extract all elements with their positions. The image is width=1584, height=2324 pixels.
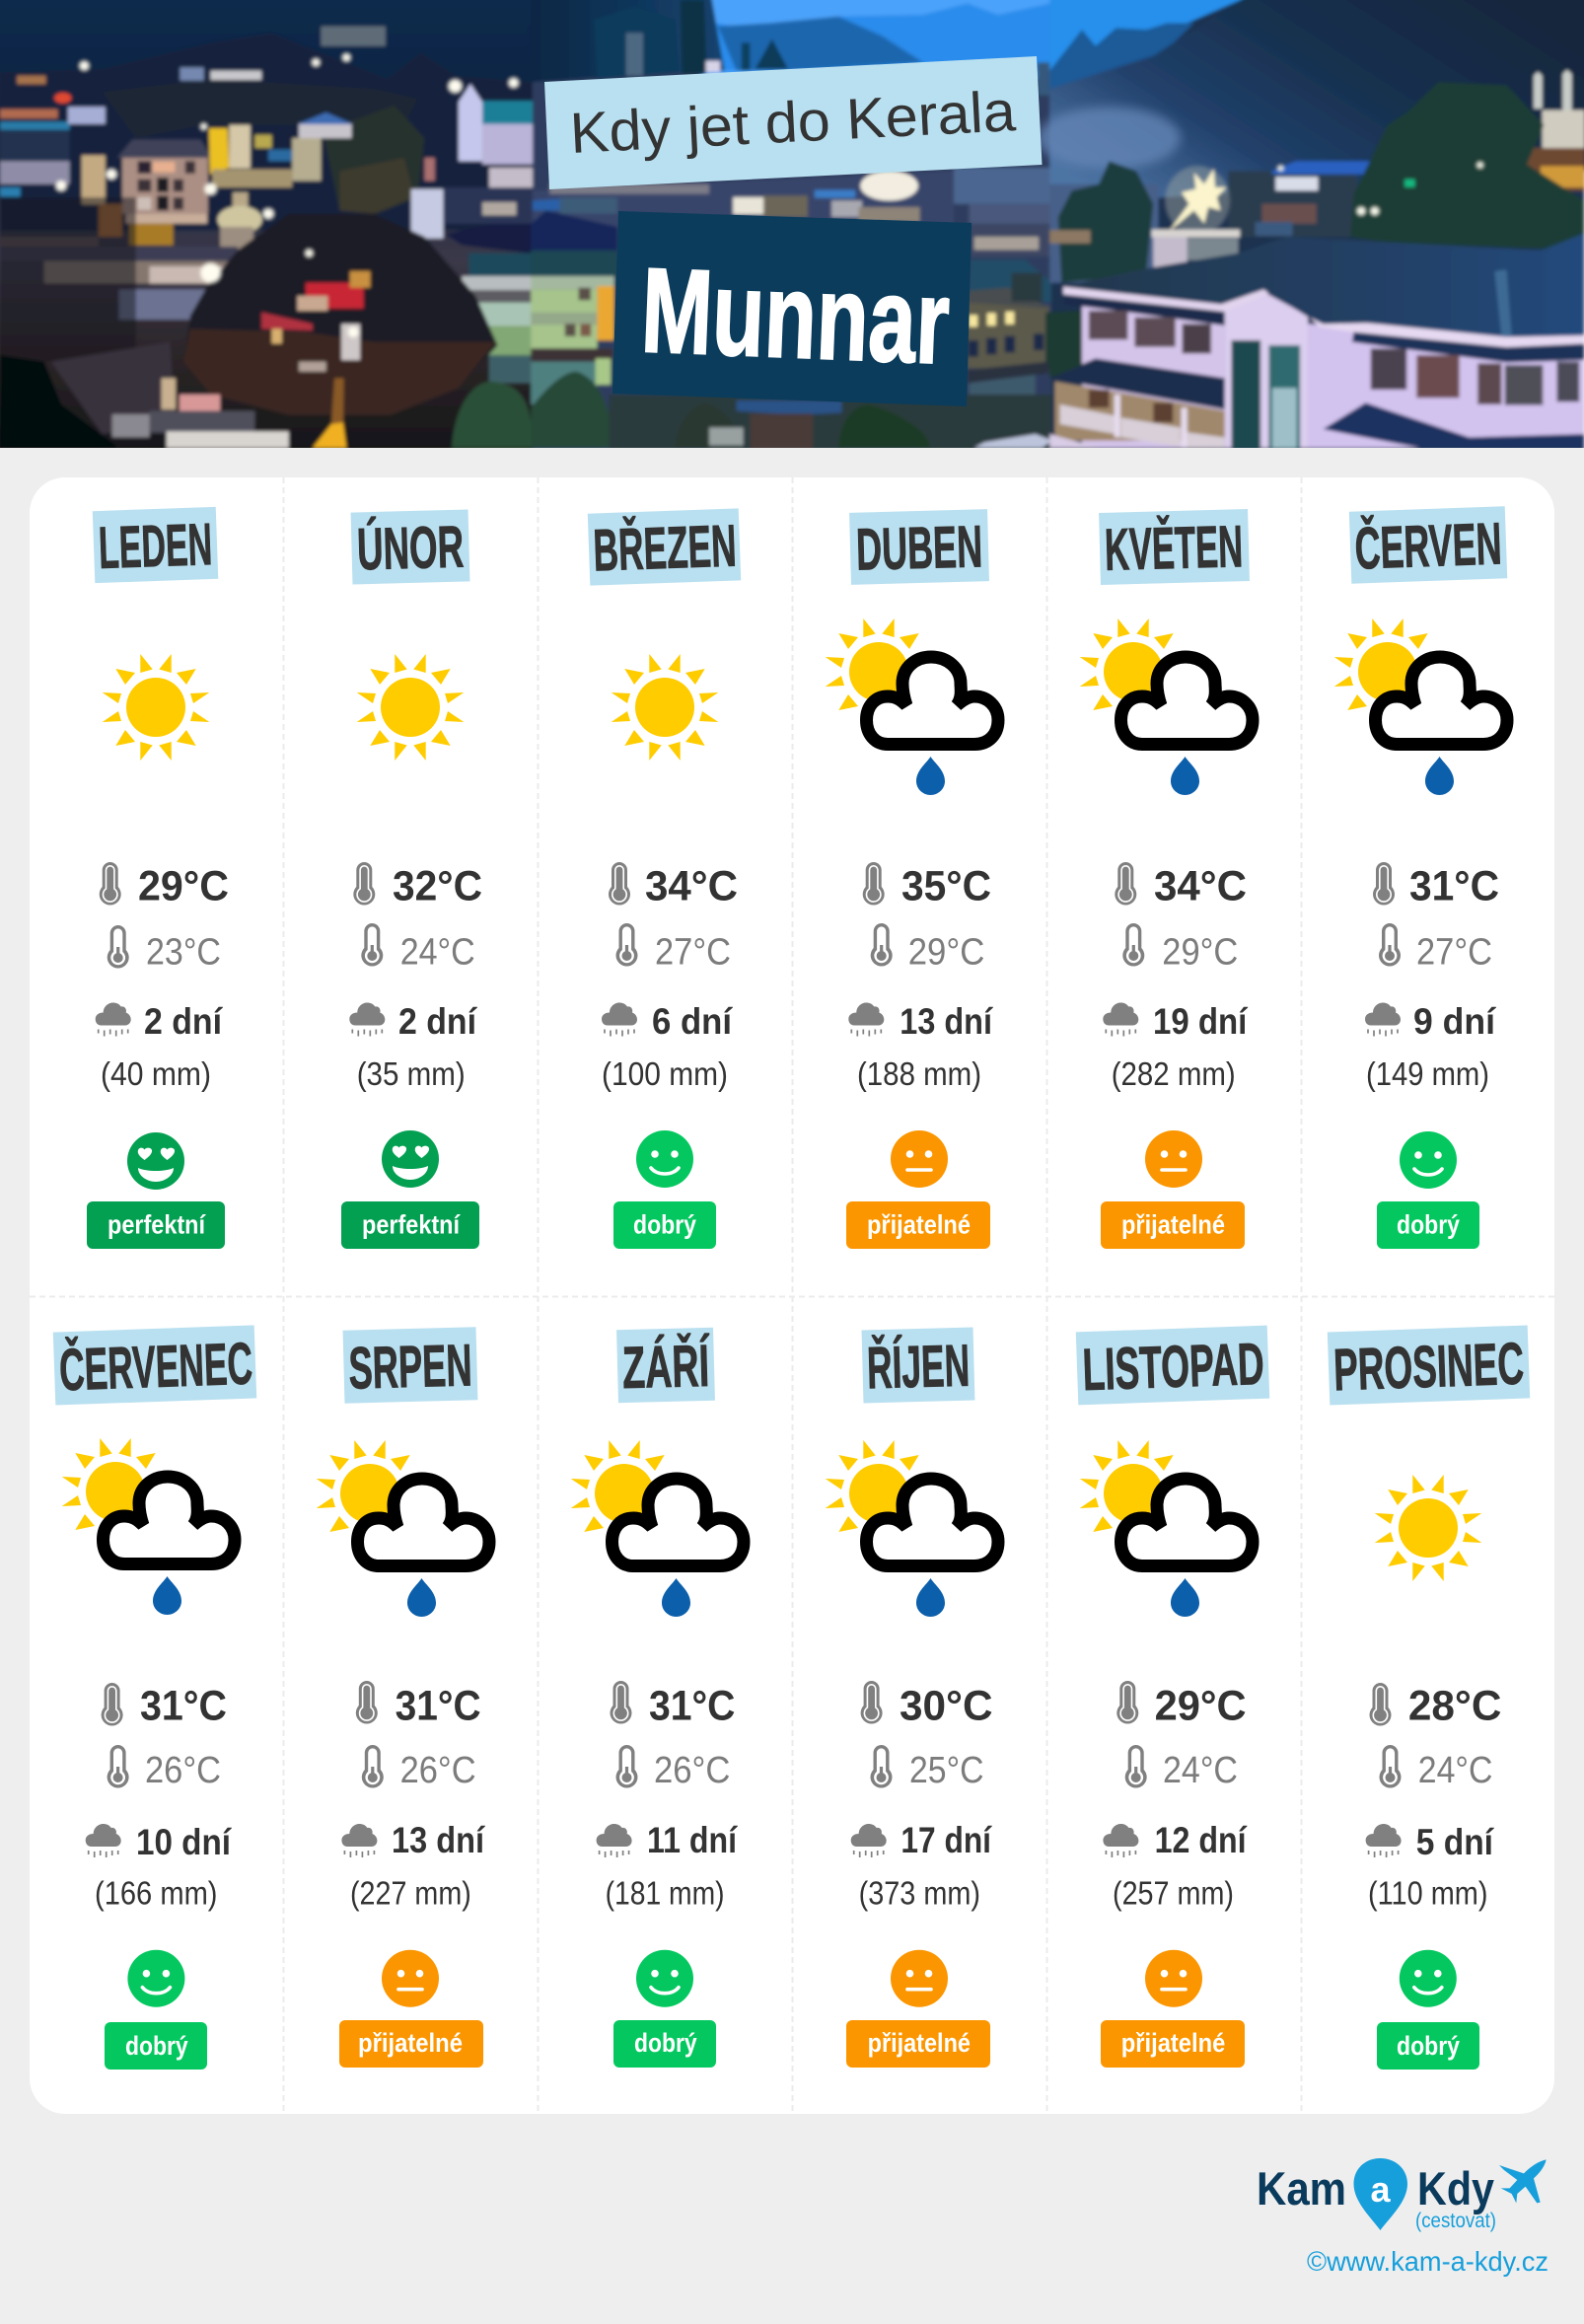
min temperature (1125, 1745, 1238, 1791)
title banner: Munnar: Munnar (639, 243, 952, 390)
rainfall: (35 mm) (357, 1055, 466, 1092)
rainfall: (227 mm) (350, 1875, 471, 1912)
month heading (588, 508, 741, 586)
rainy days: 17 dní (900, 1820, 992, 1860)
min temperature (1379, 923, 1492, 973)
icon: sun (357, 654, 464, 761)
max temperature (1116, 1681, 1247, 1730)
rating badge: dobrý (1397, 1209, 1460, 1239)
month: ČERVENEC (53, 1325, 256, 2070)
month heading: ČERVENEC (58, 1331, 253, 1403)
min temperature (362, 1745, 476, 1791)
month heading (862, 1328, 974, 1403)
max temperature (863, 862, 991, 909)
rainy days: 13 dní (900, 1001, 994, 1042)
min temperature (1122, 923, 1238, 973)
icon: sun with rain cloud (826, 1440, 998, 1617)
max temperature (1369, 1683, 1501, 1730)
max temperature (102, 1683, 227, 1730)
subtitle banner: Kdy jet do Kerala (544, 56, 1042, 189)
rating face (891, 1950, 948, 2007)
rainy days (851, 1820, 992, 1860)
min temperature: 24°C (400, 931, 475, 973)
rating face (1400, 1131, 1457, 1189)
icon: sun (612, 654, 718, 761)
rating badge (613, 1201, 716, 1249)
rating badge (1377, 1201, 1479, 1249)
icon: sun (103, 654, 209, 761)
rating badge: přijatelné (1121, 2028, 1225, 2058)
max temperature: 31°C (1409, 862, 1499, 909)
month heading (351, 509, 469, 585)
rating face (382, 1130, 439, 1188)
min temperature (1379, 1745, 1492, 1791)
rating badge (105, 2022, 207, 2070)
max temperature: 34°C (1154, 862, 1247, 909)
month heading: KVĚTEN (1104, 513, 1244, 583)
header photo: Munnar town at dusk (0, 0, 1584, 454)
icon: map pin: a (1370, 2169, 1391, 2210)
month: LISTOPAD (1076, 1326, 1269, 2068)
windows (1089, 311, 1127, 339)
church (459, 84, 482, 161)
rainy days: 9 dní (1413, 1001, 1497, 1042)
left part of the town (0, 0, 543, 454)
panel: monthly climate table (30, 477, 1554, 2114)
rainy days (1103, 1001, 1249, 1042)
rainy days (341, 1820, 486, 1860)
rating badge (846, 1201, 990, 1249)
rating badge (846, 2020, 990, 2068)
min temperature: 26°C (400, 1750, 476, 1791)
icon: sun with rain cloud (571, 1440, 744, 1617)
month heading (53, 1325, 256, 1406)
rating face (127, 1950, 184, 2007)
month heading (1076, 1326, 1269, 1405)
rating face (382, 1950, 439, 2007)
pale green house (447, 228, 533, 254)
rating badge: přijatelné (358, 2028, 463, 2058)
rating badge: přijatelné (1121, 1209, 1225, 1239)
icon: map pin (1353, 2158, 1407, 2230)
rainy days: 6 dní (652, 1001, 734, 1042)
min temperature: 26°C (145, 1750, 221, 1791)
max temperature (609, 862, 738, 909)
month: SRPEN (317, 1327, 489, 2068)
rainy days (1366, 1822, 1495, 1862)
month heading: DUBEN (855, 513, 983, 583)
rating face (1145, 1130, 1202, 1188)
icon: sun with rain cloud (317, 1440, 489, 1617)
rainy days: 2 dní (144, 1001, 224, 1042)
min temperature: 25°C (909, 1750, 984, 1791)
rating face (636, 1950, 693, 2007)
big tree (187, 213, 499, 357)
walls (1082, 306, 1225, 448)
min temperature: 29°C (908, 931, 984, 973)
max temperature: 31°C (140, 1683, 227, 1730)
icon: sun with rain cloud (1334, 618, 1507, 795)
month heading: LEDEN (98, 511, 213, 581)
rainfall: (188 mm) (857, 1055, 981, 1092)
month: ČERVEN (1334, 506, 1507, 1249)
rainy days: 5 dní (1416, 1822, 1495, 1862)
rainfall: (100 mm) (602, 1055, 728, 1092)
logo: Kam a Kdy: (cestovat) (1415, 2210, 1496, 2232)
min temperature (361, 923, 475, 973)
rainy days: 13 dní (392, 1820, 486, 1860)
max temperature (1115, 862, 1247, 909)
house beside the title (531, 210, 617, 251)
rainfall: (149 mm) (1366, 1055, 1489, 1092)
rating badge: přijatelné (867, 1209, 971, 1239)
rating badge (1377, 2022, 1479, 2070)
min temperature (108, 1745, 221, 1791)
rating badge: perfektní (362, 1209, 461, 1239)
max temperature: 29°C (138, 862, 229, 909)
rainfall: (282 mm) (1112, 1055, 1236, 1092)
month: LEDEN (87, 507, 229, 1249)
min temperature: 26°C (654, 1750, 730, 1791)
max temperature: 32°C (393, 862, 482, 909)
right part: hillside and white colonial building (1038, 0, 1584, 454)
rainy days (597, 1820, 738, 1860)
rainy days (1103, 1820, 1248, 1860)
rating face (127, 1132, 184, 1190)
rainy days: 2 dní (398, 1001, 478, 1042)
month: DUBEN (826, 509, 998, 1249)
rainy days (96, 1001, 224, 1042)
title banner: Munnar (612, 211, 972, 406)
min temperature: 27°C (1416, 931, 1492, 973)
rating badge (1101, 2020, 1245, 2068)
roof (1063, 234, 1584, 337)
rainy days (1365, 1001, 1497, 1042)
min temperature: 27°C (655, 931, 731, 973)
month heading: ZÁŘÍ (621, 1333, 711, 1401)
rainfall: (181 mm) (606, 1875, 725, 1912)
max temperature: 31°C (649, 1683, 735, 1730)
rating badge (339, 2020, 483, 2068)
rating badge: dobrý (634, 2028, 697, 2058)
rating badge: dobrý (633, 1209, 696, 1239)
illuminated star on a pedestal (1165, 166, 1230, 235)
month heading: SRPEN (348, 1332, 472, 1402)
min temperature (615, 1745, 730, 1791)
month: PROSINEC (1328, 1325, 1530, 2070)
icon: sun with rain cloud (826, 618, 998, 795)
month heading (616, 1328, 715, 1403)
month heading (343, 1327, 477, 1404)
rainy days: 19 dní (1153, 1001, 1249, 1042)
month: ŘÍJEN (826, 1328, 998, 2068)
spot lights (55, 53, 519, 337)
month: ZÁŘÍ (571, 1328, 744, 2068)
min temperature (615, 923, 731, 973)
min temperature: 24°C (1163, 1750, 1238, 1791)
rating face (636, 1130, 693, 1188)
logo: Kam a Kdy (1257, 2158, 1547, 2232)
rating badge (613, 2020, 716, 2068)
porch (1049, 358, 1225, 409)
subtitle banner: Kdy jet do Kerala: Kdy jet do Kerala (568, 79, 1018, 166)
website credit: ©www.kam-a-kdy.cz (1307, 2246, 1548, 2277)
rating badge: přijatelné (868, 2028, 971, 2058)
rainy days (86, 1822, 233, 1862)
max temperature: 28°C (1408, 1683, 1501, 1730)
icon: sun with rain cloud (62, 1438, 235, 1615)
min temperature: 23°C (146, 931, 221, 973)
month heading: BŘEZEN (592, 512, 738, 584)
max temperature (353, 862, 482, 909)
icon: airplane (1499, 2159, 1547, 2203)
rainy days: 12 dní (1155, 1820, 1248, 1860)
max temperature (861, 1681, 992, 1730)
min temperature: 29°C (1162, 931, 1238, 973)
rainfall: (40 mm) (101, 1055, 211, 1092)
month heading (849, 509, 989, 585)
rainy days (602, 1001, 734, 1042)
rainy days (848, 1001, 994, 1042)
max temperature: 29°C (1155, 1683, 1247, 1730)
rating face (891, 1130, 948, 1188)
max temperature: 34°C (645, 862, 738, 909)
max temperature: 30°C (900, 1683, 992, 1730)
rainfall: (373 mm) (859, 1875, 980, 1912)
rating face (1400, 1950, 1457, 2007)
centre part: sky, mountains and houses (531, 0, 1065, 454)
max temperature (100, 862, 229, 909)
rating badge: perfektní (108, 1209, 206, 1239)
month: ÚNOR (341, 509, 482, 1249)
rainy days: 11 dní (647, 1820, 738, 1860)
month: KVĚTEN (1080, 509, 1253, 1249)
month heading: ŘÍJEN (866, 1333, 971, 1401)
month heading (93, 507, 218, 583)
rainy days: 10 dní (136, 1822, 233, 1862)
month heading (1349, 506, 1507, 584)
min temperature (871, 923, 984, 973)
house right of the title (968, 293, 1048, 368)
rainfall: (166 mm) (95, 1875, 217, 1912)
max temperature: 31°C (396, 1683, 481, 1730)
bare tree and lower-left (0, 197, 136, 362)
month heading: LISTOPAD (1081, 1331, 1265, 1403)
logo: Kam a Kdy: Kam (1257, 2162, 1346, 2215)
icon: sun with rain cloud (1080, 1440, 1253, 1617)
max temperature (610, 1681, 735, 1730)
max temperature (1373, 862, 1499, 909)
month heading: ÚNOR (356, 514, 465, 582)
rating badge (1101, 1201, 1245, 1249)
mid streets (132, 245, 240, 260)
month: BŘEZEN (588, 508, 741, 1249)
below the title (609, 395, 1057, 451)
min temperature (870, 1745, 984, 1791)
rating face (1145, 1950, 1202, 2007)
rainfall: (257 mm) (1113, 1875, 1234, 1912)
rating badge (341, 1201, 479, 1249)
max temperature: 35°C (901, 862, 991, 909)
rainfall: (110 mm) (1368, 1875, 1487, 1912)
icon: sun with rain cloud (1080, 618, 1253, 795)
rating badge: dobrý (1397, 2031, 1460, 2061)
rating badge: dobrý (125, 2031, 188, 2061)
logo: Kam a Kdy: Kdy (1417, 2162, 1494, 2215)
min temperature: 24°C (1418, 1750, 1492, 1791)
min temperature (108, 925, 221, 973)
month heading (1099, 509, 1250, 585)
rainy days (349, 1001, 478, 1042)
rating badge (87, 1201, 225, 1249)
icon: sun (1375, 1475, 1481, 1581)
max temperature (356, 1681, 481, 1730)
